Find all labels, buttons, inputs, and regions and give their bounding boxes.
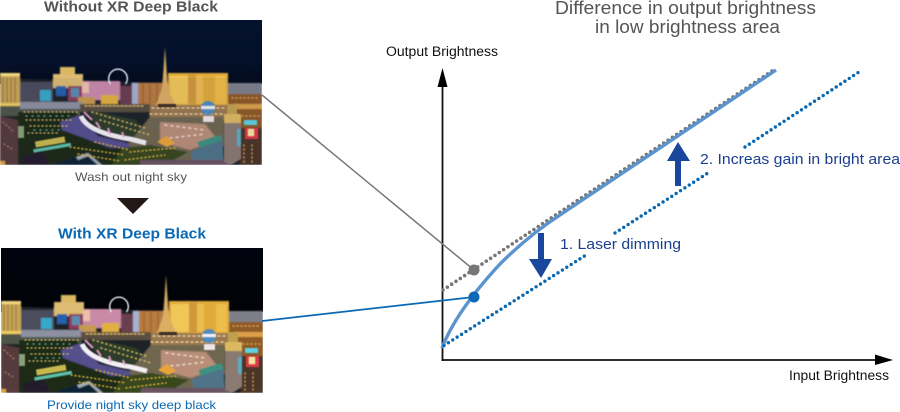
y axis arrow xyxy=(438,68,448,361)
x axis arrow xyxy=(442,354,893,365)
chart: output vs input brightness xyxy=(386,44,900,383)
label: increase gain: 2. Increas gain in bright area xyxy=(700,151,900,168)
label: laser dimming: 1. Laser dimming xyxy=(560,236,681,253)
chart title xyxy=(555,0,816,37)
axis label: output brightness: Output Brightness xyxy=(386,44,498,59)
caption: provide night sky deep black: Provide night sky deep black xyxy=(47,398,217,412)
chart title: in low brightness area xyxy=(595,16,781,37)
dotted gray line: without XR Deep Black xyxy=(443,69,775,290)
solid blue curve: with XR Deep Black xyxy=(442,70,776,348)
connector: blue line from bottom photo to blue dot xyxy=(262,292,480,321)
dotted blue line: middle segment xyxy=(615,171,711,233)
panel: with XR Deep Black xyxy=(1,226,263,412)
arrow: laser dimming down xyxy=(529,233,552,278)
caption: wash out night sky: Wash out night sky xyxy=(75,170,187,184)
dotted blue line: upper segment xyxy=(745,70,862,147)
icon: down triangle between photos xyxy=(117,198,149,214)
connector: gray line from top photo to gray dot xyxy=(262,95,480,276)
photo: washed out Las Vegas night view xyxy=(0,20,262,165)
photo: deep black Las Vegas night view xyxy=(1,248,263,393)
arrow: increase gain up xyxy=(667,142,690,186)
panel: without XR Deep Black xyxy=(0,0,262,184)
dotted blue line: lower segment xyxy=(444,255,586,346)
heading: with XR Deep Black: With XR Deep Black xyxy=(58,226,207,242)
axis label: input brightness: Input Brightness xyxy=(789,368,889,383)
